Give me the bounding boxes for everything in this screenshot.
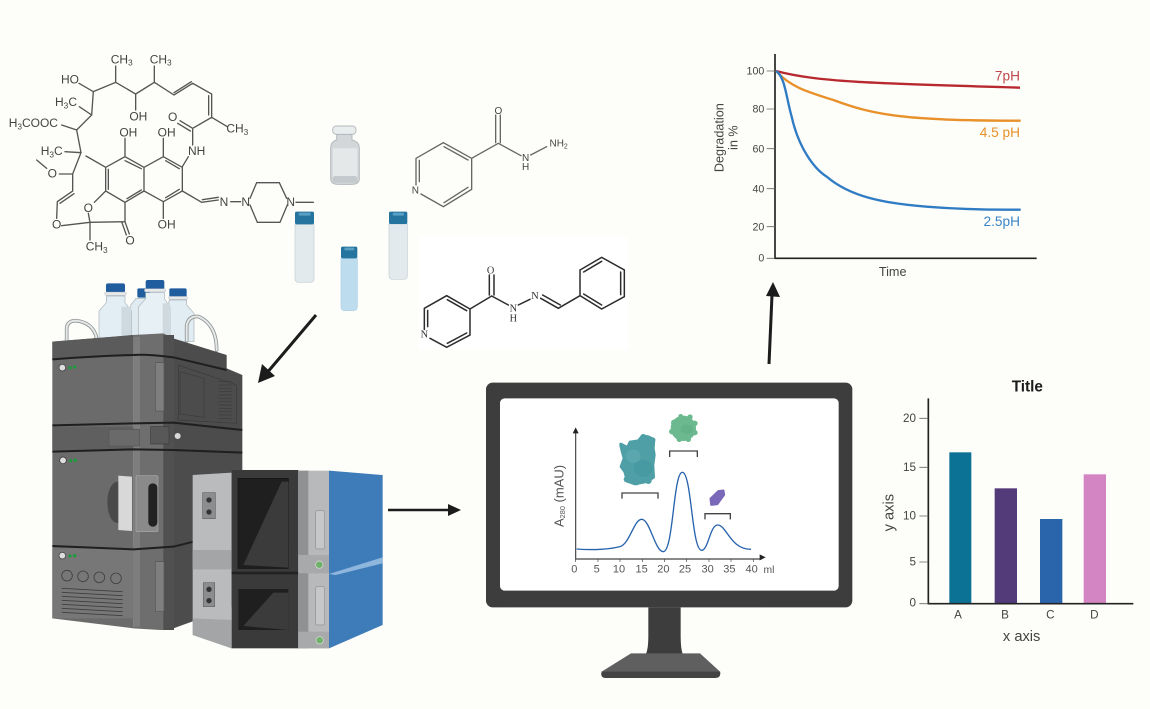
- HPLC instrument: [52, 280, 383, 648]
- chemical structure: rifampicin: HO: [61, 72, 79, 86]
- chemical structure: isoniazid: NH: [550, 139, 564, 150]
- y tick labels: 80: [752, 104, 764, 116]
- y axis title second line: in %: [726, 125, 740, 150]
- chemical structure: rifampicin: OH: [158, 126, 176, 140]
- chemical structure: rifampicin: CH: [226, 122, 244, 136]
- y tick labels: 0: [758, 253, 764, 265]
- line chart: degradation vs time: [712, 54, 1037, 279]
- y tick labels: 10: [903, 510, 917, 523]
- chemical structure: isoniazid: N: [412, 185, 419, 196]
- curve: 4.5 pH: [776, 71, 1021, 121]
- chemical structure: rifampicin: CH: [86, 240, 103, 254]
- chemical structure: rifampicin: N: [286, 195, 295, 209]
- y tick labels: [747, 66, 764, 265]
- chromatogram tick labels: 25: [679, 563, 691, 575]
- bars: [949, 452, 1106, 604]
- chemical structure: rifampicin: NH: [188, 144, 205, 158]
- solvent bottles: [99, 280, 194, 342]
- chromatogram tick labels: 20: [657, 563, 669, 575]
- chemical structure: rifampicin: H: [41, 144, 49, 158]
- chemical structure: isoniazid: H: [522, 162, 529, 173]
- chemical structure: rifampicin: C: [54, 144, 63, 158]
- chemical structure: benzylidene isoniazid on white card: H: [510, 314, 518, 325]
- chemical structure: isoniazid: O: [494, 106, 502, 117]
- monitor frame: [486, 383, 852, 607]
- y tick labels: 0: [910, 597, 917, 610]
- chemical structure: rifampicin: C: [68, 95, 77, 109]
- label: 4.5 pH: 4.5 pH: [980, 125, 1020, 140]
- y tick labels: [903, 412, 917, 610]
- chemical structure: isoniazid: [412, 106, 568, 207]
- x axis title: Time: [879, 265, 906, 279]
- status lights and buttons: [59, 364, 181, 616]
- chemical structure: rifampicin: 3: [244, 127, 249, 137]
- chromatogram tick labels: 40: [746, 563, 758, 575]
- chemical structure: rifampicin: O: [52, 217, 61, 231]
- chemical structure: rifampicin: O: [48, 167, 57, 181]
- y tick labels: 40: [752, 183, 764, 195]
- category labels: A: [954, 609, 962, 622]
- chemical structure: benzylidene isoniazid on white card: O: [487, 265, 495, 276]
- chemical structure: rifampicin: 3: [128, 58, 133, 68]
- chemical structure: benzylidene isoniazid on white card: N: [421, 330, 429, 341]
- pump stack side: [173, 338, 242, 628]
- chromatogram axes: [573, 427, 766, 562]
- bar chart: [881, 378, 1133, 645]
- chemical structure: rifampicin: 3: [49, 149, 54, 159]
- chemical structure: rifampicin: OH: [129, 110, 147, 124]
- chemical structure: rifampicin: N: [241, 195, 250, 209]
- y axis title: Degradation: [712, 103, 726, 172]
- chromatogram tick labels: 30: [702, 563, 714, 575]
- chemical structure: rifampicin: [9, 52, 313, 255]
- y ticks: [767, 71, 775, 258]
- chemical structure: rifampicin: 3: [17, 121, 22, 131]
- chemical structure: rifampicin: O: [125, 233, 135, 247]
- y tick labels: 60: [752, 143, 764, 155]
- y tick labels: 20: [903, 412, 917, 425]
- chromatogram y label: A: [552, 518, 567, 527]
- protein: large teal: [619, 434, 655, 485]
- detector modules: [193, 470, 383, 648]
- y ticks: [919, 418, 928, 604]
- chemical structure: isoniazid: N: [522, 153, 529, 164]
- vial: left blue cap: [295, 212, 314, 282]
- chemical structure: isoniazid: 2: [564, 143, 568, 150]
- category labels: C: [1046, 609, 1055, 622]
- pump stack front: [52, 333, 242, 630]
- chromatogram y label: 280: [558, 506, 567, 518]
- vial: right blue cap: [389, 212, 407, 279]
- arrow: monitor to degradation plot: [766, 282, 780, 364]
- x axis title: x axis: [1003, 629, 1040, 645]
- side panel vents: [178, 365, 237, 423]
- chemical structure: rifampicin: OH: [158, 218, 176, 232]
- chemical structure: rifampicin: N: [220, 195, 228, 209]
- y tick labels: 15: [903, 461, 916, 474]
- computer monitor with chromatogram: [486, 383, 852, 678]
- chromatogram tick labels: ml: [764, 565, 774, 576]
- category labels: [954, 609, 1099, 622]
- axes: [928, 398, 1133, 604]
- curve: 2.5pH: [776, 71, 1021, 210]
- vial: centre filled: [341, 247, 357, 311]
- chemical structure: benzylidene isoniazid on white card: N: [531, 291, 539, 302]
- y tick labels: 5: [910, 556, 916, 569]
- chemical structure: rifampicin: 3: [167, 58, 172, 68]
- arrow: HPLC to monitor: [388, 504, 461, 516]
- y tick labels: 20: [752, 221, 764, 233]
- chromatogram tick labels: 10: [613, 563, 625, 575]
- axes: [775, 54, 1037, 258]
- chemical structure: rifampicin: CH: [150, 52, 167, 66]
- arrow: vials to HPLC: [258, 315, 316, 383]
- chromatogram tick labels: 15: [636, 563, 648, 575]
- protein: small purple: [711, 491, 724, 505]
- monitor screen: [500, 398, 839, 591]
- chemical structure: rifampicin: O: [168, 110, 177, 124]
- chromatogram tick labels: 5: [594, 563, 600, 575]
- chemical structure: benzylidene isoniazid on white card: [418, 237, 628, 350]
- chromatogram tick labels: 0: [571, 563, 577, 575]
- chemical structure: rifampicin: H: [9, 116, 17, 130]
- chemical structure: rifampicin: CH: [111, 52, 128, 66]
- chart title: Title: [1012, 378, 1043, 395]
- chemical structure: rifampicin: H: [55, 95, 64, 109]
- curve: 7pH: [776, 71, 1020, 88]
- vial: glass crimp-top: [331, 126, 359, 184]
- chromatogram tick labels: 35: [723, 563, 735, 575]
- sample vials: [295, 106, 628, 350]
- category labels: D: [1090, 609, 1099, 622]
- solvent tubing: [67, 317, 217, 350]
- peak brackets: [622, 451, 730, 519]
- category labels: B: [1001, 609, 1009, 622]
- chemical structure: rifampicin: OH: [119, 126, 137, 140]
- chemical structure: rifampicin: COOC: [22, 116, 58, 130]
- chemical structure: rifampicin: O: [84, 201, 93, 215]
- protein: round green: [669, 414, 698, 442]
- chemical structure: rifampicin: 3: [64, 100, 69, 110]
- chromatogram y label: (mAU): [552, 465, 567, 506]
- label: 2.5pH: 2.5pH: [984, 214, 1020, 229]
- monitor stand: [601, 607, 720, 678]
- y tick labels: 100: [747, 66, 764, 78]
- chemical structure: benzylidene isoniazid on white card: N: [510, 304, 518, 315]
- chemical structure: rifampicin: 3: [103, 245, 108, 255]
- chromatogram tick labels: [571, 563, 774, 576]
- chromatogram curve: [577, 472, 751, 552]
- label: 7pH: 7pH: [995, 68, 1020, 83]
- y axis title: y axis: [881, 494, 897, 531]
